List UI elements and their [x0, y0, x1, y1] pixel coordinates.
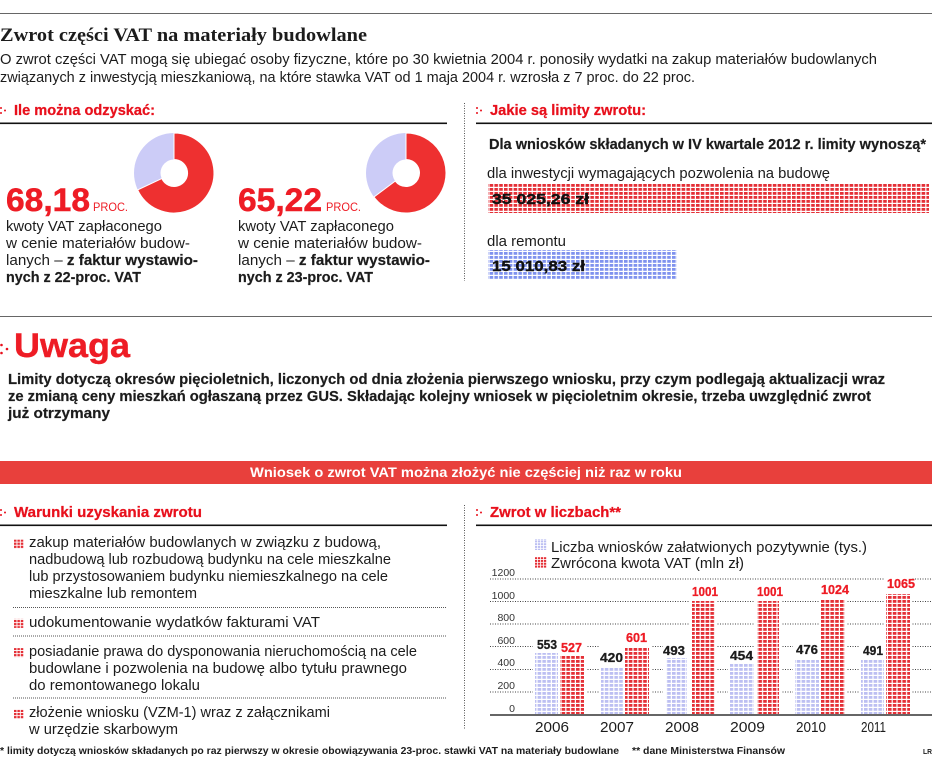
description: faktury 22 proc.: w cenie materiałów budow- [5, 236, 190, 252]
condition 3 [14, 643, 417, 694]
bar chart: 1200 [492, 567, 515, 579]
uwaga text: już otrzymany [7, 406, 110, 422]
bar: 15 010,83 zł [488, 250, 677, 280]
year labels: 2009 [730, 720, 765, 736]
footnotes: LR [923, 749, 932, 756]
bars 2008 [663, 584, 718, 715]
condition 4 [14, 704, 330, 738]
legend: Liczba wniosków załatwionych pozytywnie (tys.) [551, 539, 867, 556]
intro text: O zwrot części VAT mogą się ubiegać osoby fizyczne, które po 30 kwietnia 2004 r. ponosiły wydatki na zakup materiałów budowlanych [0, 52, 877, 68]
bars 2010: 1024 [821, 582, 850, 597]
heading: zwrot w liczbach: Zwrot w liczbach** [490, 504, 621, 521]
figure: 68,18 proc.: 68,18 [6, 182, 90, 218]
figure: 68,18 proc. [6, 182, 128, 218]
year labels: 2006 [535, 720, 569, 736]
bars 2007 [599, 630, 651, 715]
description: faktury 22 proc.: lanych – z faktur wystawio- [6, 253, 198, 269]
bars 2007: 601 [626, 630, 647, 645]
description: faktury 23 proc.: w cenie materiałów budow- [237, 236, 422, 252]
heading: ile można odzyskać: Ile można odzyskać: [14, 102, 155, 119]
limit label: remont: dla remontu [487, 233, 566, 250]
bars 2007: 420 [600, 650, 623, 665]
bars 2008: 1001 [692, 584, 718, 599]
condition 3: posiadanie prawa do dysponowania nieruchomością na cele [29, 643, 417, 660]
bars 2011 [859, 576, 915, 715]
bars 2010: 476 [796, 642, 818, 657]
bar chart: 800 [497, 612, 515, 624]
bars 2011: 491 [863, 643, 883, 658]
panel: zwrot w liczbach [476, 504, 932, 736]
bars 2006: 553 [537, 637, 557, 652]
panel: ile można odzyskać [0, 102, 447, 286]
condition 1: mieszkalne lub remontem [29, 585, 197, 602]
year labels [535, 720, 886, 736]
description: faktury 22 proc. [5, 219, 198, 286]
bar: 35 025,26 zł: 35 025,26 zł [492, 191, 590, 208]
bar: 35 025,26 zł [488, 183, 929, 213]
heading: warunki: Warunki uzyskania zwrotu [14, 504, 202, 521]
bar chart: 200 [497, 680, 515, 692]
description: faktury 23 proc. [237, 219, 430, 286]
condition 1 [14, 534, 391, 602]
uwaga text: Limity dotyczą okresów pięcioletnich, liczonych od dnia złożenia pierwszego wniosku, przy czym podlegają aktualizacji wraz [8, 372, 885, 388]
bars 2010 [793, 582, 850, 715]
description: faktury 22 proc.: kwoty VAT zapłaconego [6, 219, 162, 235]
description: faktury 23 proc.: nych z 23-proc. VAT [238, 270, 373, 286]
legend [535, 539, 867, 572]
bars 2009: 1001 [757, 584, 783, 599]
bar chart: 0 [509, 703, 515, 715]
condition 3: budowlane i pozwolenia na budowę albo tytułu prawnego [29, 660, 407, 677]
condition 4: złożenie wniosku (VZM-1) wraz z załącznikami [29, 704, 330, 721]
footnotes [0, 745, 932, 757]
bar chart: 400 [497, 657, 515, 669]
condition 3: do remontowanego lokalu [29, 677, 200, 694]
heading: jakie są limity zwrotu: Jakie są limity zwrotu: [490, 102, 646, 119]
year labels: 2007 [600, 720, 634, 736]
banner: Wniosek o zwrot VAT można złożyć nie częściej niż raz w roku [250, 464, 682, 480]
panel: warunki uzyskania zwrotu [0, 504, 447, 738]
figure: 68,18 proc.: PROC. [93, 202, 128, 214]
title: Zwrot części VAT na materiały budowlane [0, 25, 367, 46]
intro text: związanych z inwestycją mieszkaniową, na które stawka VAT od 1 maja 2004 r. wzrosła z 7 proc. do 22 proc. [0, 70, 695, 86]
uwaga text: ze zmianą ceny mieszkań ogłaszaną przez GUS. Składając kolejny wniosek w pięcioletnim okresie, trzeba uwzględnić zwrot [8, 389, 871, 405]
bars 2009: 454 [730, 648, 754, 663]
figure: 65,22 proc.: PROC. [326, 202, 361, 214]
panel: uwaga [0, 327, 885, 422]
year labels: 2011 [861, 720, 886, 736]
description: faktury 23 proc.: lanych – z faktur wystawio- [238, 253, 430, 269]
limits subheading: Dla wniosków składanych w IV kwartale 2012 r. limity wynoszą* [489, 137, 926, 153]
banner [0, 461, 932, 484]
bars 2009 [728, 584, 783, 715]
panel: jakie są limity zwrotu [476, 102, 932, 280]
heading: uwaga: Uwaga [14, 327, 131, 365]
description: faktury 22 proc.: nych z 22-proc. VAT [6, 270, 141, 286]
bar: 15 010,83 zł: 15 010,83 zł [492, 258, 586, 275]
uwaga text [7, 372, 885, 422]
year labels: 2008 [665, 720, 699, 736]
bars 2006 [533, 637, 586, 715]
year labels: 2010 [796, 720, 826, 736]
bars 2006: 527 [561, 640, 582, 655]
condition 1: lub przystosowaniem budynku niemieszkalnego na cele [29, 568, 388, 585]
bar chart: 1000 [492, 590, 515, 602]
condition 1: nadbudową lub rozbudową budynku na cele mieszkalne [29, 551, 391, 568]
bar chart [490, 567, 932, 736]
bars 2011: 1065 [887, 576, 915, 591]
condition 4: w urzędzie skarbowym [28, 721, 178, 738]
bar chart: 600 [497, 635, 515, 647]
condition 1: zakup materiałów budowlanych w związku z budową, [29, 534, 381, 551]
donut chart: 68,18 proc. [134, 133, 214, 213]
figure: 65,22 proc.: 65,22 [238, 182, 322, 218]
footnotes: * limity dotyczą wniosków składanych po raz pierwszy w okresie obowiązywania 23-proc. stawki VAT na materiały budowlane [0, 745, 619, 757]
intro text [0, 52, 877, 86]
bars 2008: 493 [663, 643, 685, 658]
donut chart: 65,22 proc. [366, 133, 446, 213]
legend: Zwrócona kwota VAT (mln zł) [551, 555, 744, 572]
description: faktury 23 proc.: kwoty VAT zapłaconego [238, 219, 394, 235]
limit label: pozwolenie: dla inwestycji wymagających pozwolenia na budowę [487, 165, 830, 182]
footnotes: ** dane Ministerstwa Finansów [632, 745, 786, 757]
figure: 65,22 proc. [238, 182, 361, 218]
condition 2: udokumentowanie wydatków fakturami VAT [29, 614, 320, 631]
